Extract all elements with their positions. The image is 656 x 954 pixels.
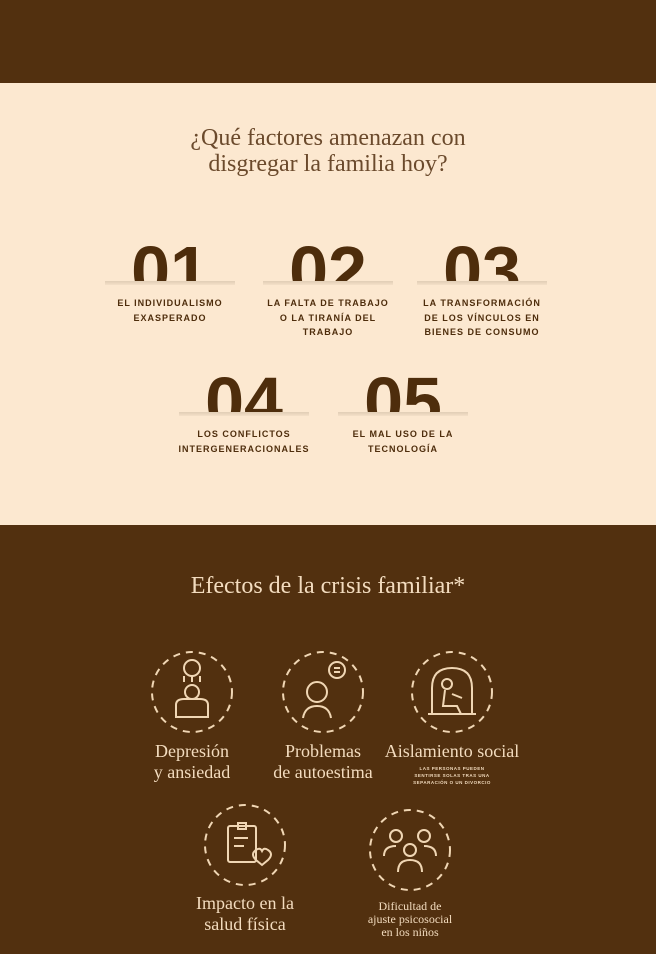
factor 04: INTERGENERACIONALES bbox=[178, 444, 310, 454]
label: isolation bbox=[384, 741, 519, 785]
factor 03 bbox=[417, 240, 547, 337]
icon: isolation bbox=[412, 652, 492, 732]
label: physical health: salud física bbox=[204, 914, 286, 934]
icon: depression bbox=[152, 652, 232, 732]
title: disgregar la familia hoy? bbox=[208, 151, 448, 177]
label: self-esteem: de autoestima bbox=[273, 762, 373, 782]
icon: self-esteem bbox=[283, 652, 363, 732]
label: isolation: SEPARACIÓN O UN DIVORCIO bbox=[413, 780, 491, 785]
label: depression: y ansiedad bbox=[154, 762, 230, 782]
label: isolation: LAS PERSONAS PUEDEN bbox=[419, 766, 484, 771]
label: children: en los niños bbox=[381, 925, 439, 939]
factor 01 bbox=[105, 240, 235, 322]
label: physical health: Impacto en la bbox=[196, 893, 294, 913]
label: children bbox=[368, 899, 452, 939]
factor 03: LA TRANSFORMACIÓN bbox=[423, 298, 541, 308]
factor 05: TECNOLOGÍA bbox=[368, 444, 438, 454]
icon: physical health bbox=[205, 805, 285, 885]
factor 02: O LA TIRANÍA DEL bbox=[280, 312, 376, 322]
effects title: Efectos de la crisis familiar* bbox=[191, 573, 465, 599]
label: children: Dificultad de bbox=[378, 899, 441, 913]
label: physical health bbox=[196, 893, 294, 934]
factor 02 bbox=[263, 240, 393, 337]
factor 01: EL INDIVIDUALISMO bbox=[117, 298, 223, 308]
label: isolation: SENTIRSE SOLAS TRAS UNA bbox=[414, 773, 490, 778]
panel: factors bbox=[0, 83, 656, 525]
factor 03: BIENES DE CONSUMO bbox=[424, 327, 540, 337]
factor 02: TRABAJO bbox=[303, 327, 353, 337]
label: self-esteem: Problemas bbox=[285, 741, 361, 761]
label: depression: Depresión bbox=[155, 741, 229, 761]
icon: children bbox=[370, 810, 450, 890]
label: children: ajuste psicosocial bbox=[368, 912, 452, 926]
title: ¿Qué factores amenazan con bbox=[190, 125, 466, 151]
factor 04 bbox=[178, 371, 310, 454]
factor 05: EL MAL USO DE LA bbox=[353, 429, 453, 439]
label: depression bbox=[154, 741, 230, 782]
factor 02: LA FALTA DE TRABAJO bbox=[267, 298, 389, 308]
label: self-esteem bbox=[273, 741, 373, 782]
title bbox=[190, 125, 466, 177]
factor 03: DE LOS VÍNCULOS EN bbox=[424, 312, 540, 322]
factor 05 bbox=[338, 371, 468, 454]
label: isolation: Aislamiento social bbox=[385, 741, 519, 761]
factor 01: EXASPERADO bbox=[133, 312, 206, 322]
factor 04: LOS CONFLICTOS bbox=[197, 429, 291, 439]
